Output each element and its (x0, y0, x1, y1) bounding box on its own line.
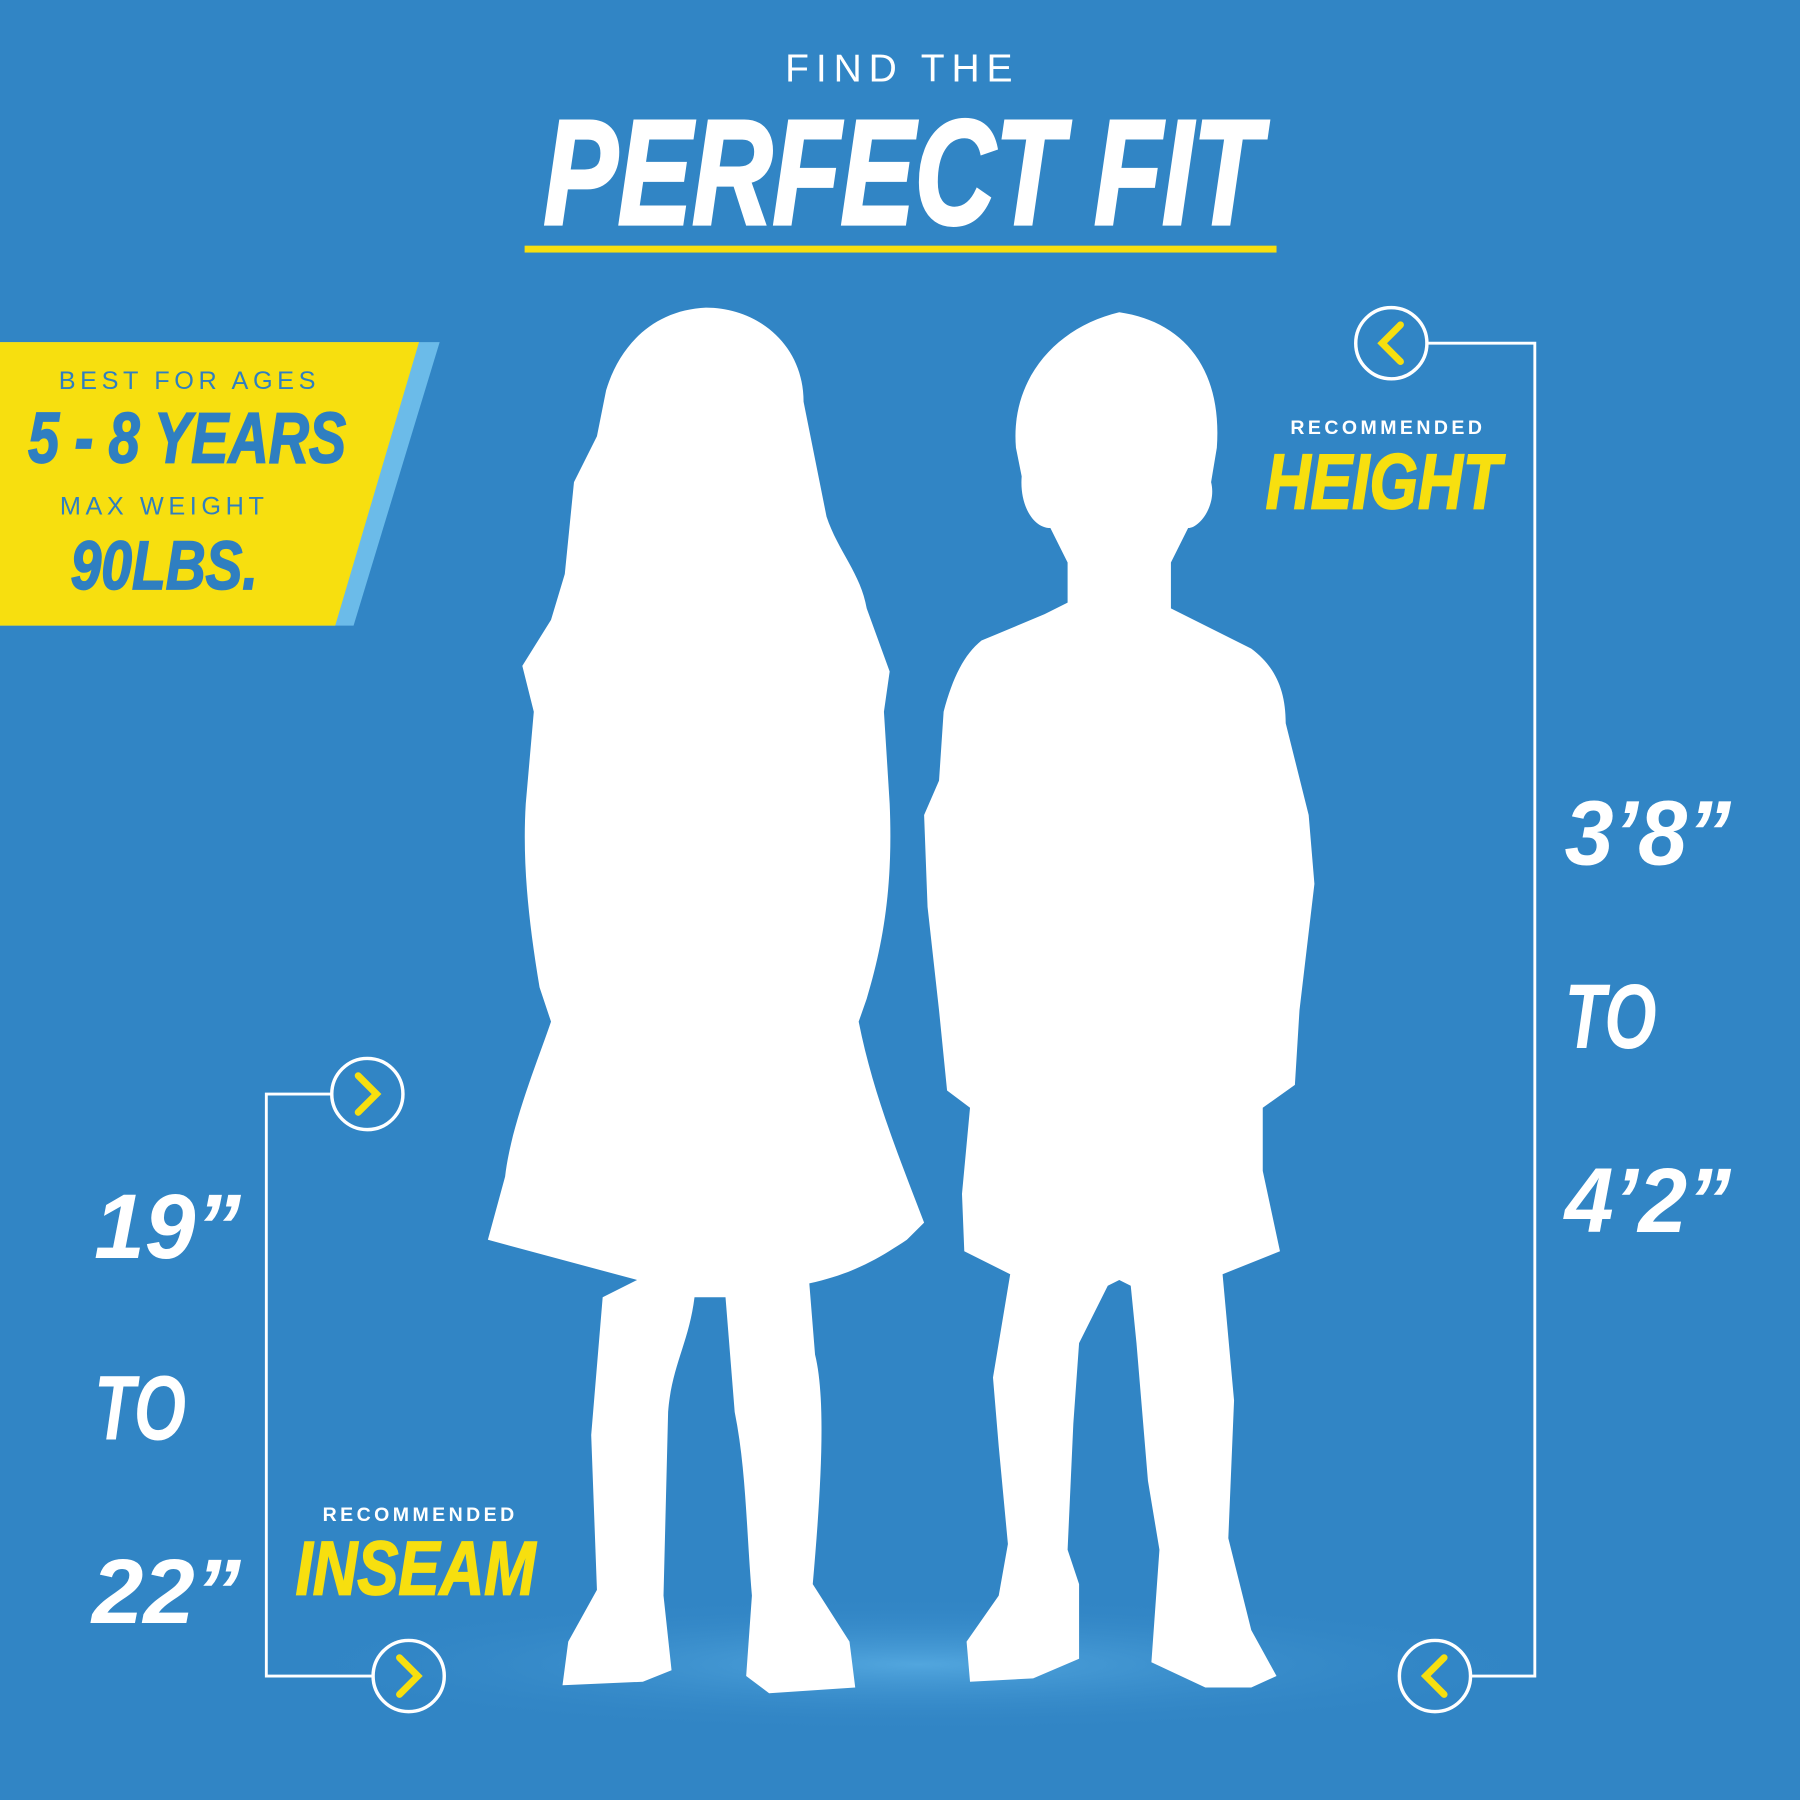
icon: inseam bottom circle (373, 1640, 444, 1712)
height values (1563, 782, 1731, 1252)
title: PERFECT FIT (544, 89, 1269, 256)
height values: 3’8” (1565, 782, 1731, 884)
inseam label: RECOMMENDED (323, 1504, 518, 1526)
inseam values: 19” (94, 1176, 241, 1278)
inseam values (90, 1176, 241, 1643)
inseam values: 22” (90, 1541, 241, 1643)
height label: HEIGHT (1266, 438, 1506, 526)
height label (1266, 417, 1506, 526)
inseam values: TO (94, 1358, 186, 1460)
inseam bracket (266, 1094, 372, 1676)
height values: 4’2” (1563, 1150, 1731, 1252)
panel: ages and weight (0, 342, 440, 626)
icon: height bottom circle (1399, 1640, 1471, 1712)
icon: inseam top circle (332, 1058, 403, 1130)
panel: ages and weight: BEST FOR AGES (59, 367, 320, 395)
title (525, 48, 1277, 256)
height values: TO (1565, 966, 1657, 1068)
boy silhouette (924, 312, 1314, 1688)
panel: ages and weight: 5 - 8 YEARS (28, 400, 346, 479)
panel: ages and weight: MAX WEIGHT (60, 492, 268, 520)
icon: height top circle (1356, 308, 1427, 379)
height bracket (1428, 343, 1535, 1676)
height label: RECOMMENDED (1290, 417, 1485, 439)
title: FIND THE (785, 48, 1019, 91)
inseam label (296, 1504, 537, 1612)
panel: ages and weight: 90LBS. (71, 527, 258, 604)
inseam label: INSEAM (296, 1527, 537, 1612)
girl silhouette (488, 308, 924, 1693)
